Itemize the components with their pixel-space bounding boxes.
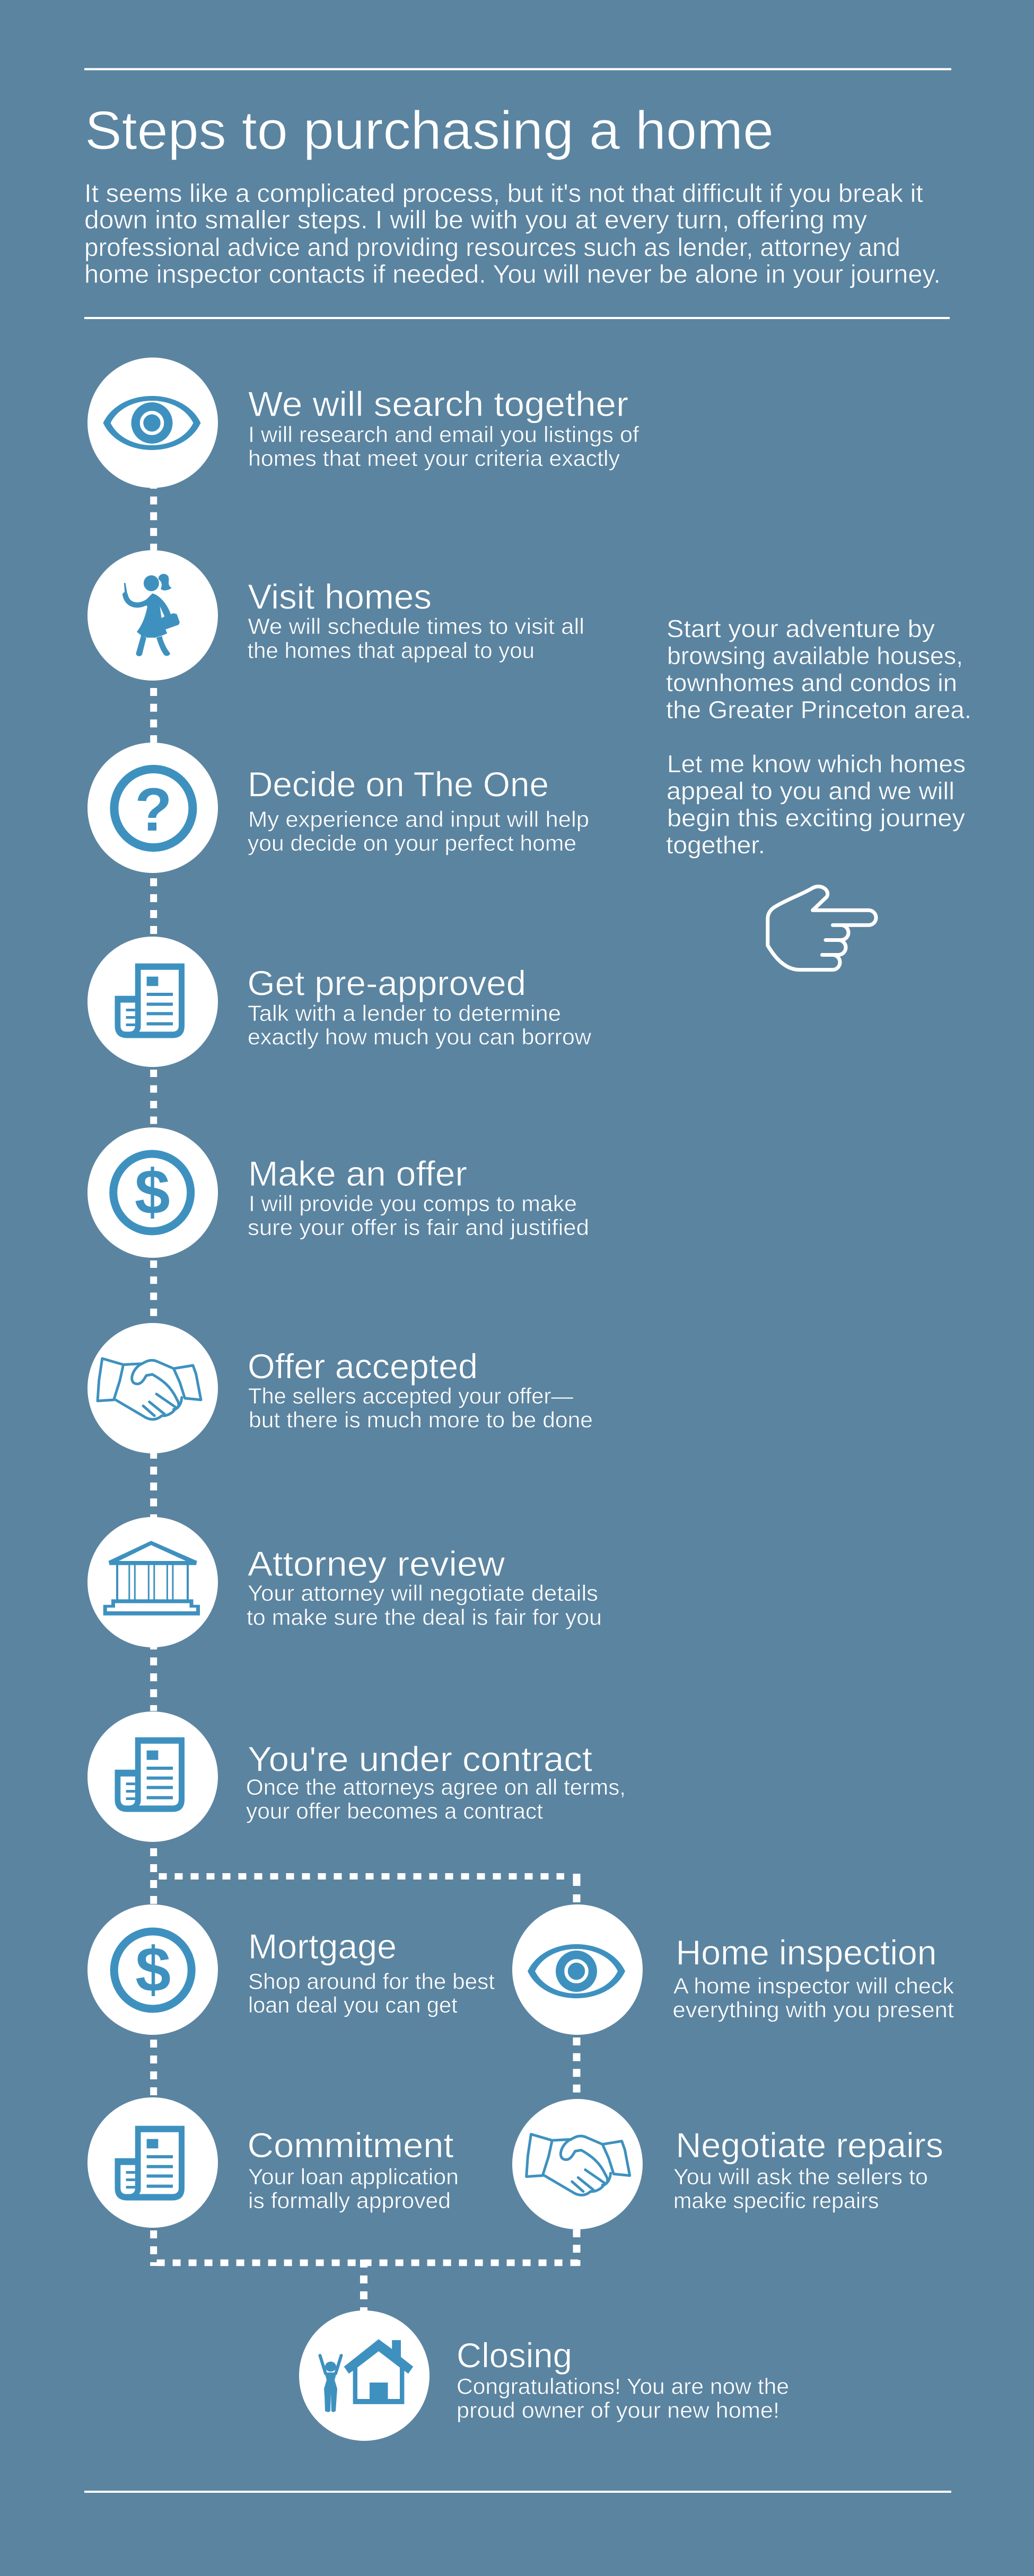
step: visit homes: We will schedule times to visit all xyxy=(248,614,584,639)
step: mortgage: Shop around for the best xyxy=(248,1969,495,1994)
icon: question mark xyxy=(114,769,192,848)
top rule xyxy=(84,68,951,70)
step: attorney review xyxy=(87,1517,602,1647)
step: decide on the one: Decide on The One xyxy=(248,764,549,804)
step: decide on the one: My experience and input will help xyxy=(248,807,589,832)
step: closing: Congratulations! You are now the xyxy=(457,2374,789,2399)
side note text: browsing available houses, xyxy=(667,642,963,669)
step: offer accepted: but there is much more to be done xyxy=(249,1407,593,1432)
step: attorney review: Your attorney will negotiate details xyxy=(248,1581,598,1605)
step: home inspection: A home inspector will check xyxy=(673,1973,954,1998)
step: decide on the one xyxy=(87,743,589,873)
side note text: appeal to you and we will xyxy=(667,777,954,805)
intro paragraph: home inspector contacts if needed. You will never be alone in your journey. xyxy=(84,261,941,288)
dashed connectors xyxy=(154,481,580,2311)
step: make an offer: I will provide you comps to make xyxy=(249,1191,577,1216)
intro paragraph: It seems like a complicated process, but it's not that difficult if you break it xyxy=(84,180,923,208)
step: mortgage: Mortgage xyxy=(248,1927,397,1966)
step: make an offer: Make an offer xyxy=(248,1154,467,1193)
side note text: begin this exciting journey xyxy=(667,804,965,832)
header divider xyxy=(84,317,950,319)
side note text: the Greater Princeton area. xyxy=(666,696,971,724)
intro paragraph: professional advice and providing resources such as lender, attorney and xyxy=(84,234,900,262)
step: offer accepted: Offer accepted xyxy=(248,1347,478,1386)
step: negotiate repairs: You will ask the sellers to xyxy=(673,2164,928,2189)
title: Steps to purchasing a home xyxy=(85,100,774,161)
step: you're under contract xyxy=(87,1712,626,1842)
step: make an offer xyxy=(87,1127,589,1258)
step: decide on the one: you decide on your perfect home xyxy=(248,831,576,855)
step: you're under contract: You're under contract xyxy=(248,1740,592,1779)
side note text: Start your adventure by xyxy=(667,615,935,642)
step: you're under contract: Once the attorneys agree on all terms, xyxy=(246,1775,626,1799)
intro paragraph xyxy=(84,180,941,288)
step: closing xyxy=(299,2310,789,2441)
side note text: together. xyxy=(666,831,765,859)
step: attorney review: to make sure the deal is fair for you xyxy=(247,1605,602,1630)
icon: person and house xyxy=(320,2339,413,2412)
step: mortgage xyxy=(87,1904,495,2035)
step: visit homes xyxy=(87,550,584,681)
step: visit homes: the homes that appeal to you xyxy=(247,638,534,663)
step: get pre-approved: Get pre-approved xyxy=(247,964,526,1003)
icon: courthouse xyxy=(103,1541,200,1616)
step: get pre-approved: Talk with a lender to determine xyxy=(248,1001,561,1026)
step: offer accepted xyxy=(87,1323,593,1453)
bottom rule xyxy=(84,2491,951,2493)
step: we will search together xyxy=(87,357,639,488)
step: commitment: Commitment xyxy=(247,2125,454,2165)
step: we will search together: homes that meet your criteria exactly xyxy=(248,446,620,471)
intro paragraph: down into smaller steps. I will be with you at every turn, offering my xyxy=(84,206,867,234)
step: you're under contract: your offer becomes a contract xyxy=(246,1798,543,1823)
step: closing: Closing xyxy=(457,2336,572,2375)
step: home inspection xyxy=(512,1904,954,2035)
step: offer accepted: The sellers accepted your offer— xyxy=(248,1383,573,1408)
step: commitment: is formally approved xyxy=(248,2188,451,2213)
step: make an offer: sure your offer is fair and justified xyxy=(248,1215,589,1240)
step: mortgage: loan deal you can get xyxy=(248,1992,458,2017)
side note text: townhomes and condos in xyxy=(666,669,957,696)
step: attorney review: Attorney review xyxy=(248,1544,505,1583)
step: visit homes: Visit homes xyxy=(248,577,432,616)
step: get pre-approved xyxy=(87,937,592,1067)
step: get pre-approved: exactly how much you can borrow xyxy=(248,1024,592,1049)
step: commitment: Your loan application xyxy=(248,2164,459,2189)
step: negotiate repairs xyxy=(512,2099,943,2229)
step: we will search together: I will research and email you listings of xyxy=(248,422,639,447)
side note text: Let me know which homes xyxy=(667,750,966,778)
step: negotiate repairs: Negotiate repairs xyxy=(676,2125,943,2165)
step: negotiate repairs: make specific repairs xyxy=(673,2188,879,2213)
step: closing: proud owner of your new home! xyxy=(457,2398,779,2423)
side note text xyxy=(666,615,971,859)
icon: pointing hand xyxy=(768,887,876,970)
step: we will search together: We will search together xyxy=(248,384,628,424)
step: commitment xyxy=(87,2097,459,2228)
step: home inspection: Home inspection xyxy=(676,1933,936,1972)
step: home inspection: everything with you present xyxy=(672,1997,954,2022)
icon: question mark: ? xyxy=(135,776,172,844)
icon: woman with phone and bag xyxy=(124,574,180,656)
